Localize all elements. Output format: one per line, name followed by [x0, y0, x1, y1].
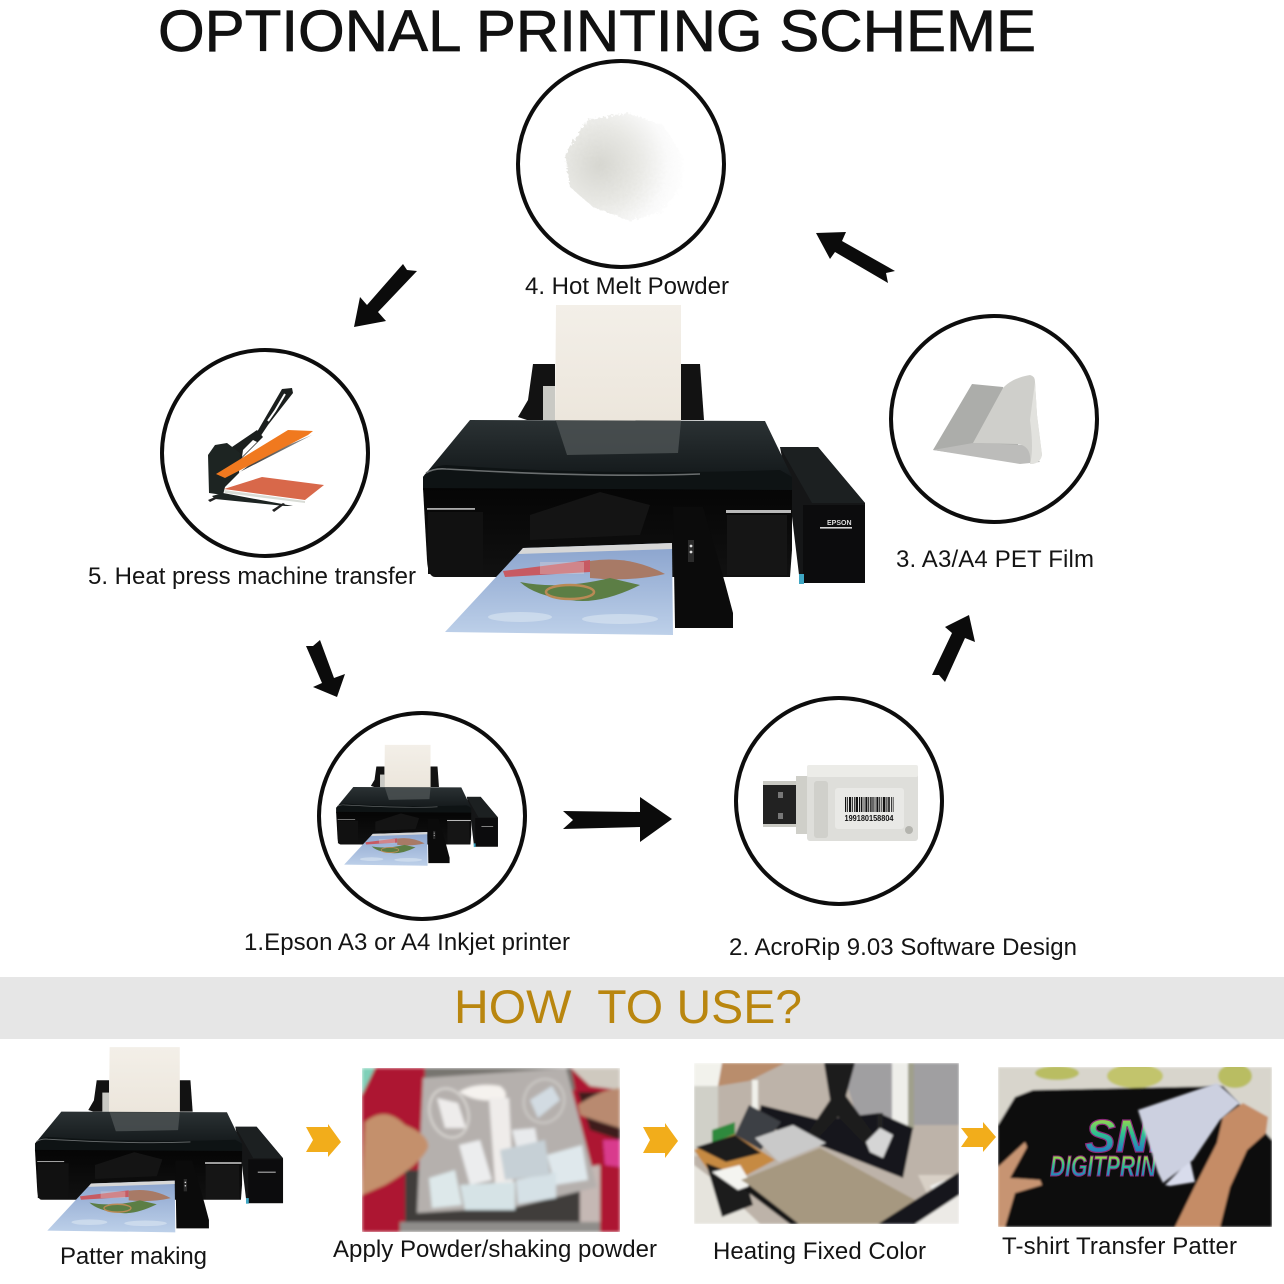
step: t-shirt transfer photo	[998, 1064, 1272, 1260]
graphic: graffiti print: SNI	[1085, 1110, 1163, 1162]
section heading: HOW TO USE?	[454, 980, 802, 1033]
arrow: printer to software	[563, 797, 672, 842]
panel: central printer	[423, 305, 865, 635]
barcode number: 199180158804	[844, 813, 894, 823]
graphic: graffiti print: DIGITPRIN	[1050, 1151, 1157, 1183]
arrow: step one to two	[306, 1124, 341, 1157]
step: apply powder photo	[333, 1068, 657, 1263]
label: step 4: 4. Hot Melt Powder	[525, 273, 729, 300]
circle frame: printer	[319, 713, 525, 919]
icon: printer with transfer sheet	[35, 1047, 283, 1232]
icon: PET film sheet	[933, 375, 1042, 464]
icon: large printer	[423, 305, 865, 635]
arrow: step two to three	[643, 1123, 678, 1158]
icon: powder heap	[565, 113, 683, 221]
panel: step 5 heat press	[88, 350, 416, 590]
step: patter making	[35, 1047, 283, 1270]
label: step 3: 3. A3/A4 PET Film	[896, 546, 1094, 573]
circle frame: heat press	[162, 350, 368, 556]
label: step 1: 1.Epson A3 or A4 Inkjet printer	[244, 929, 570, 956]
icon: USB dongle	[763, 765, 918, 841]
circle frame: software	[736, 698, 942, 904]
arrow: film to powder	[816, 232, 895, 283]
photo: peeling film from shirt	[998, 1064, 1272, 1227]
photo: heat press in use	[694, 1063, 959, 1224]
graphic: graffiti print	[1050, 1118, 1156, 1177]
photo: shaking powder over tray	[362, 1068, 620, 1232]
arrow: powder to heat press	[354, 264, 417, 327]
arrow: step three to four	[961, 1122, 996, 1152]
title: OPTIONAL PRINTING SCHEME	[158, 0, 1036, 64]
panel: step 1 printer	[244, 713, 570, 956]
peeled sheet edge	[1138, 1083, 1240, 1186]
panel: step 4 hot melt powder	[518, 61, 729, 300]
caption: t-shirt transfer: T-shirt Transfer Patter	[1002, 1233, 1237, 1260]
step: heating photo	[694, 1063, 959, 1265]
label: step 2: 2. AcroRip 9.03 Software Design	[729, 934, 1077, 961]
icon: heat press machine	[208, 388, 324, 512]
caption: patter making: Patter making	[60, 1243, 207, 1270]
section band: how to use	[0, 977, 1284, 1039]
label: step 5: 5. Heat press machine transfer	[88, 563, 416, 590]
icon: small printer	[336, 745, 498, 866]
brand label: EPSON	[827, 520, 852, 527]
circle frame: powder	[518, 61, 724, 267]
circle frame: film	[891, 316, 1097, 522]
arrow: software to film	[932, 615, 975, 682]
panel: step 3 PET film	[891, 316, 1097, 573]
caption: heating: Heating Fixed Color	[713, 1238, 926, 1265]
arrow: heat press to printer	[306, 640, 345, 697]
panel: step 2 software dongle	[729, 698, 1077, 961]
caption: apply powder: Apply Powder/shaking powder	[333, 1236, 657, 1263]
